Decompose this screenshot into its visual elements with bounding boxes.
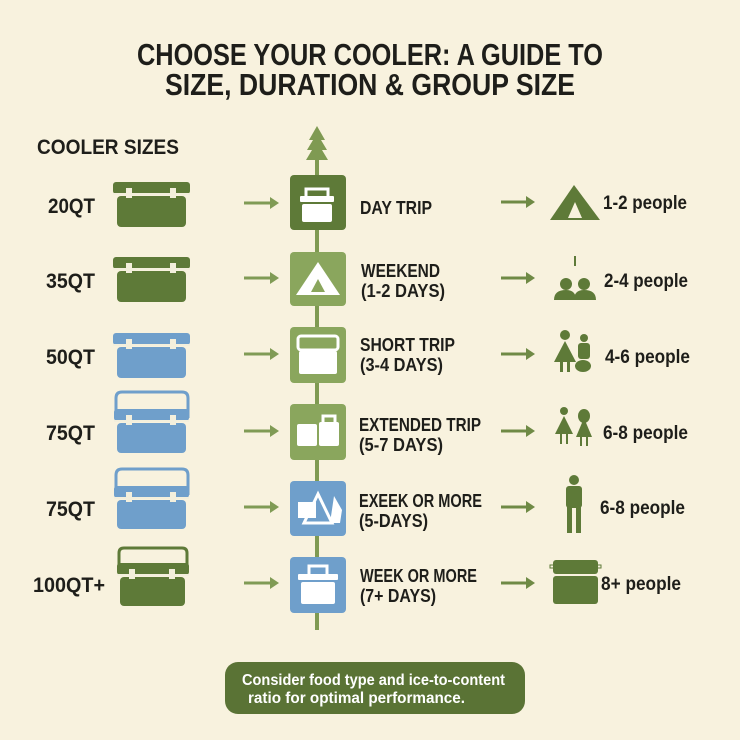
arrows to group sizes bbox=[501, 196, 535, 589]
trip duration texts: (7+ DAYS) bbox=[360, 586, 436, 606]
trip duration texts: WEEKEND bbox=[361, 261, 440, 281]
arrows to trip icons bbox=[244, 197, 279, 589]
icon: short trip cooler bbox=[290, 327, 346, 383]
icon: two girls bbox=[555, 407, 592, 446]
icon: two people bbox=[554, 256, 596, 300]
trip duration texts: (5-7 DAYS) bbox=[359, 435, 443, 455]
cooler 35QT bbox=[113, 257, 190, 302]
icon: week or more cooler bbox=[290, 557, 346, 613]
group size texts: 4-6 people bbox=[605, 347, 690, 368]
size labels: 35QT bbox=[46, 270, 95, 293]
cooler 50QT bbox=[113, 333, 190, 378]
title: SIZE, DURATION & GROUP SIZE bbox=[165, 67, 575, 102]
trip duration texts: SHORT TRIP bbox=[360, 335, 455, 355]
title bbox=[137, 37, 603, 102]
icon: tent group bbox=[550, 185, 600, 220]
callout: tip bbox=[225, 662, 525, 714]
group size texts bbox=[600, 193, 690, 595]
cooler 100QT+ bbox=[117, 548, 189, 606]
size labels: 75QT bbox=[46, 498, 95, 521]
cooler 75QT bbox=[114, 392, 189, 453]
heading: cooler sizes: COOLER SIZES bbox=[37, 136, 179, 159]
trip duration texts: EXEEK OR MORE bbox=[359, 491, 482, 511]
icon: extended trip two coolers bbox=[290, 404, 346, 460]
callout: tip: Consider food type and ice-to-content bbox=[242, 672, 506, 689]
size labels: 50QT bbox=[46, 346, 95, 369]
icon: family bbox=[554, 330, 591, 372]
trip duration texts: (1-2 DAYS) bbox=[361, 281, 445, 301]
trip duration texts: (5-DAYS) bbox=[359, 511, 428, 531]
icon: big cooler bbox=[550, 560, 601, 604]
size labels bbox=[33, 195, 105, 597]
group size texts: 2-4 people bbox=[604, 271, 688, 292]
size labels: 20QT bbox=[48, 195, 95, 218]
group size texts: 6-8 people bbox=[600, 498, 685, 519]
group size texts: 8+ people bbox=[601, 574, 681, 595]
cooler 20QT bbox=[113, 182, 190, 227]
trip duration texts: (3-4 DAYS) bbox=[360, 355, 443, 375]
group size texts: 6-8 people bbox=[603, 423, 688, 444]
size labels: 100QT+ bbox=[33, 574, 105, 597]
size labels: 75QT bbox=[46, 422, 95, 445]
trip duration texts: WEEK OR MORE bbox=[360, 566, 477, 586]
trip duration texts bbox=[359, 198, 482, 606]
timeline line with tree bbox=[306, 126, 328, 630]
title: CHOOSE YOUR COOLER: A GUIDE TO bbox=[137, 37, 603, 72]
callout: tip: ratio for optimal performance. bbox=[248, 690, 465, 707]
group size texts: 1-2 people bbox=[603, 193, 687, 214]
icon: day trip cooler bbox=[290, 175, 346, 230]
icon: weekend tent bbox=[290, 252, 346, 306]
trip duration texts: DAY TRIP bbox=[360, 198, 432, 218]
icon: single person bbox=[566, 475, 582, 533]
icon: week tent blue bbox=[290, 481, 346, 536]
cooler 75QT second bbox=[114, 469, 189, 529]
trip duration texts: EXTENDED TRIP bbox=[359, 415, 481, 435]
